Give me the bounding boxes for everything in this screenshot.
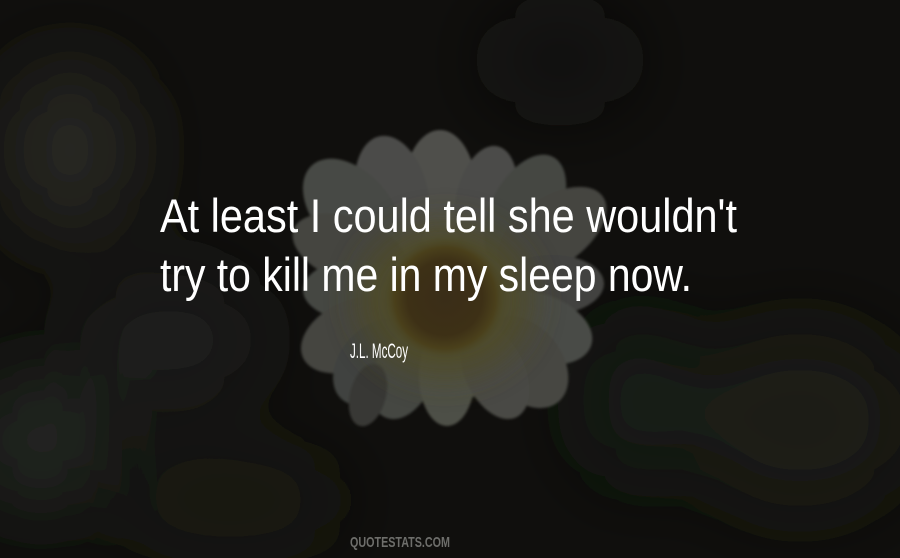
yellow glow [357, 222, 533, 378]
petals [283, 129, 622, 431]
author: J.L. McCoy [350, 340, 408, 363]
quote text [160, 189, 737, 301]
daisy flower [283, 129, 622, 431]
quote text: try to kill me in my sleep now. [160, 248, 692, 301]
quote text: At least I could tell she wouldn't [160, 189, 737, 242]
flower centre [383, 236, 507, 360]
watermark: QUOTESTATS.COM [350, 534, 450, 551]
